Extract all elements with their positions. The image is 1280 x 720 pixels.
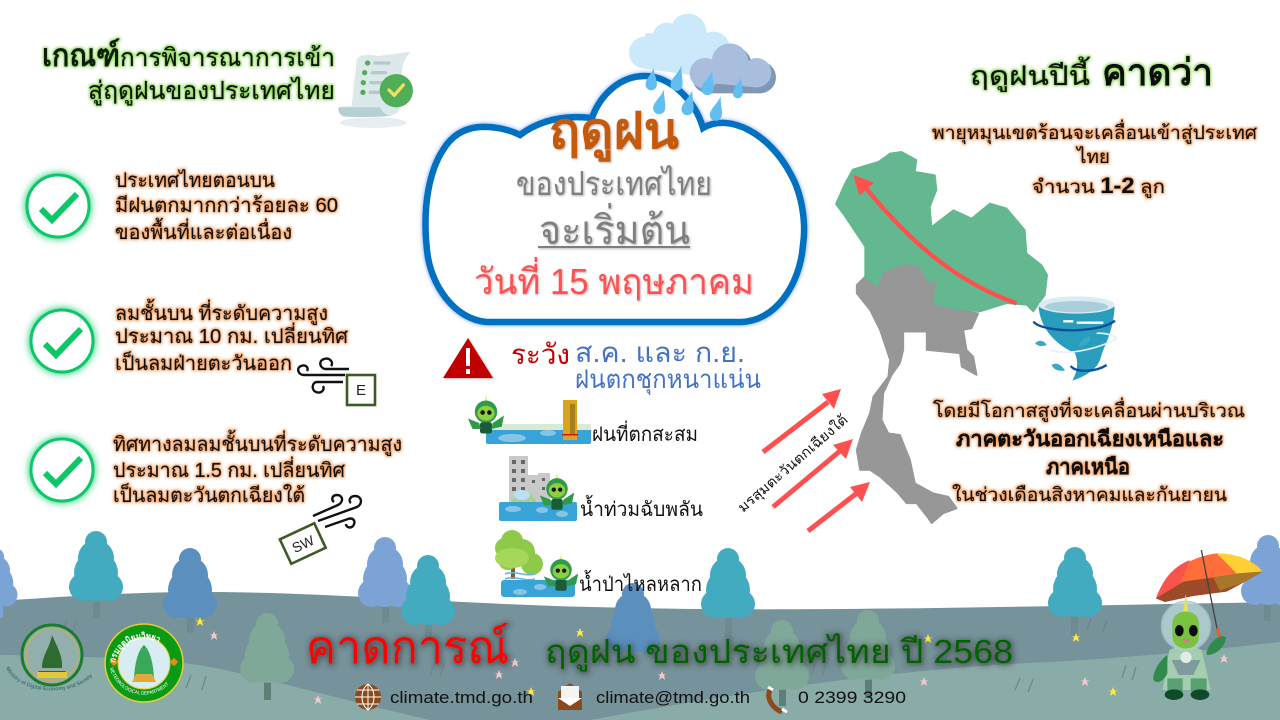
heading: criteria: เกณฑ์ <box>42 38 120 73</box>
icon: southwest wind sign <box>280 495 361 564</box>
text: criterion 1: มีฝนตกมากกว่าร้อยละ 60 <box>115 195 338 217</box>
hazard: accumulated rain: ฝนที่ตกสะสม <box>592 420 698 446</box>
icon: check mark 2 <box>31 310 93 372</box>
icon: rain clouds <box>629 14 776 122</box>
icon: warning triangle <box>443 338 493 378</box>
text: likely track regions <box>933 397 1245 506</box>
text: criterion 1 <box>115 169 338 244</box>
hazard: flash flood from forest <box>495 530 702 597</box>
text: criterion 3: เป็นลมตะวันตกเฉียงใต้ <box>113 482 305 507</box>
contact: email: climate@tmd.go.th <box>596 688 750 707</box>
title: rainy season of Thailand 2568: ฤดูฝน ของประเทศไทย ปี 2568 <box>545 633 1013 672</box>
heading: criteria: สู่ฤดูฝนของประเทศไทย <box>88 76 335 106</box>
text: tropical cyclone forecast: พายุหมุนเขตร้อนจะเคลื่อนเข้าสู่ประเทศ <box>932 119 1257 145</box>
contact: phone: 0 2399 3290 <box>798 688 906 707</box>
text: criterion 2: ประมาณ 10 กม. เปลี่ยนทิศ <box>115 322 348 348</box>
text: likely track regions: ภาคเหนือ <box>1046 455 1130 479</box>
criterion 2 <box>31 299 375 405</box>
map: central and southern region <box>857 263 978 523</box>
suit <box>1163 647 1211 690</box>
text: criterion 1: ประเทศไทยตอนบน <box>115 169 275 192</box>
icon: east wind sign: E <box>356 382 366 399</box>
logo: meteorological department: กรมอุตุนิยมวิทยา <box>110 632 160 662</box>
title: forecast: คาดการณ์ <box>306 621 509 673</box>
text: criterion 2: ลมชั้นบน ที่ระดับความสูง <box>115 299 328 326</box>
text: date: วันที่ 15 พฤษภาคม <box>474 257 754 302</box>
cloud outline <box>425 76 804 322</box>
logo: ministry: Ministry of Digital Economy and Society <box>6 666 92 691</box>
text: of Thailand: ของประเทศไทย <box>516 165 712 202</box>
icon: check mark 1 <box>27 175 89 237</box>
flowers and grass <box>62 617 1229 704</box>
heading: this year's season: ฤดูฝนปีนี้ <box>970 56 1090 92</box>
astronaut helmet <box>1161 601 1211 651</box>
text: likely track regions: โดยมีโอกาสสูงที่จะเคลื่อนผ่านบริเวณ <box>933 397 1245 422</box>
hazard: flash flood: น้ำท่วมฉับพลัน <box>580 495 703 521</box>
icon: tornado <box>1033 296 1117 381</box>
map: north and northeast region <box>836 152 1047 312</box>
text: rainy season: ฤดูฝน <box>549 103 679 162</box>
heading: criteria: การพิจารณาการเข้า <box>120 44 335 72</box>
contact: website: climate.tmd.go.th <box>390 688 533 707</box>
text: criterion 3 <box>113 430 402 507</box>
logo: ministry <box>6 624 92 691</box>
panel: cloud start date <box>425 76 804 322</box>
text: tropical cyclone forecast: ไทย <box>1075 146 1110 168</box>
text: criterion 1: ของพื้นที่และต่อเนื่อง <box>115 218 292 244</box>
logo: meteorological department: METEOROLOGICAL DEPARTMENT <box>110 667 168 695</box>
contact: phone <box>768 687 906 712</box>
criterion 1 <box>27 169 338 244</box>
text: tropical cyclone forecast: จำนวน 1-2 ลูก <box>1032 173 1165 198</box>
face <box>1172 612 1199 648</box>
heading: this year's season: คาดว่า <box>1102 52 1213 93</box>
contact: website <box>355 684 533 710</box>
text: criterion 3: ทิศทางลมลมชั้นบนที่ระดับความสูง <box>113 430 402 457</box>
text: criterion 2: เป็นลมฝ่ายตะวันออก <box>115 350 292 375</box>
text: likely track regions: ในช่วงเดือนสิงหาคมและกันยายน <box>952 484 1227 506</box>
text: beware: ระวัง <box>511 339 570 370</box>
icon: east wind sign <box>298 359 375 405</box>
criterion 3 <box>31 430 402 564</box>
arrows: southwest monsoon <box>763 389 870 531</box>
text: will begin: จะเริ่มต้น <box>539 203 690 253</box>
panel: warning <box>443 337 761 395</box>
icon: checklist scroll <box>338 52 413 128</box>
text: southwest monsoon: มรสุมตะวันตกเฉียงใต้ <box>734 411 851 516</box>
text: criterion 2 <box>115 299 348 375</box>
text: tropical cyclone forecast <box>932 119 1257 198</box>
map of Thailand <box>836 152 1117 523</box>
hazard: flash flood <box>499 456 703 521</box>
heading: this year's season <box>970 52 1213 93</box>
heading: criteria <box>42 38 335 106</box>
hazard: accumulated rain <box>468 394 698 446</box>
text: months: ส.ค. และ ก.ย. <box>575 337 745 368</box>
text: heavy rain: ฝนตกชุกหนาแน่น <box>575 364 761 395</box>
text: criterion 3: ประมาณ 1.5 กม. เปลี่ยนทิศ <box>113 456 345 482</box>
mascot with umbrella <box>1153 550 1263 700</box>
trees <box>0 531 1280 706</box>
contact: email <box>558 683 750 710</box>
logo: meteorological department <box>104 623 184 703</box>
hazard: flash flood from forest: น้ำป่าไหลหลาก <box>579 570 702 596</box>
icon: check mark 3 <box>31 439 93 501</box>
text: likely track regions: ภาคตะวันออกเฉียงเหนือและ <box>956 427 1224 451</box>
umbrella <box>1156 550 1263 644</box>
arrow: storm track <box>853 175 1017 303</box>
icon: southwest wind sign: SW <box>289 532 317 556</box>
